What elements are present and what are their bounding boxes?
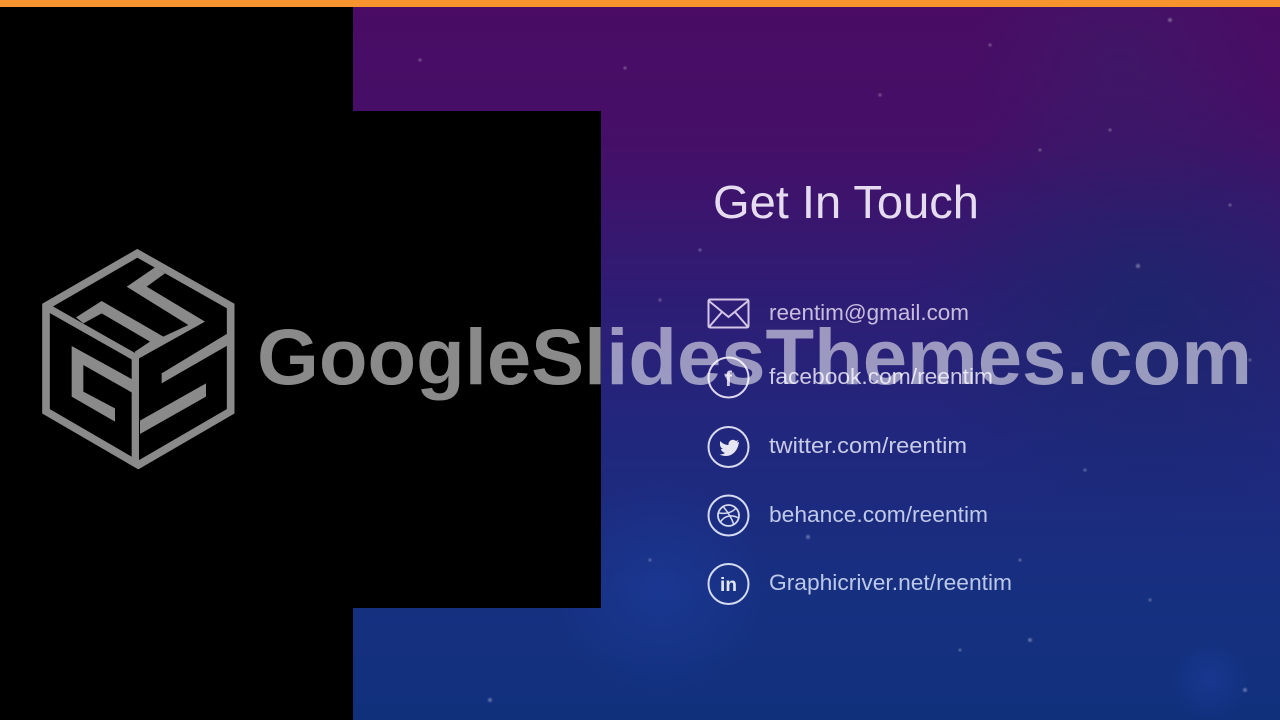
- icon: facebook: [708, 358, 748, 398]
- contact: graphicriver: [708, 564, 1012, 604]
- contact: email: [708, 300, 969, 328]
- email address: reentim@gmail.com: [769, 300, 969, 325]
- top orange bar: [0, 0, 1280, 7]
- contact: twitter: [708, 427, 967, 467]
- graphicriver address: Graphicriver.net/reentim: [769, 570, 1012, 595]
- icon: linkedin: in: [720, 575, 737, 596]
- contact: behance: [708, 496, 988, 536]
- twitter address: twitter.com/reentim: [769, 433, 967, 458]
- icon: dribbble ball: [708, 496, 748, 536]
- black left panel: [0, 7, 601, 720]
- watermark text: GoogleSlidesThemes.com: [257, 312, 1252, 401]
- facebook address: facebook.com/reentim: [769, 364, 993, 389]
- icon: linkedin: [708, 564, 748, 604]
- icon: twitter: [708, 427, 748, 467]
- icon: facebook: f: [725, 368, 733, 391]
- icon: envelope: [708, 300, 748, 328]
- watermark logo: cube: [46, 253, 231, 465]
- heading: Get In Touch: Get In Touch: [713, 176, 979, 228]
- behance address: behance.com/reentim: [769, 502, 988, 527]
- contact: facebook: [708, 358, 993, 398]
